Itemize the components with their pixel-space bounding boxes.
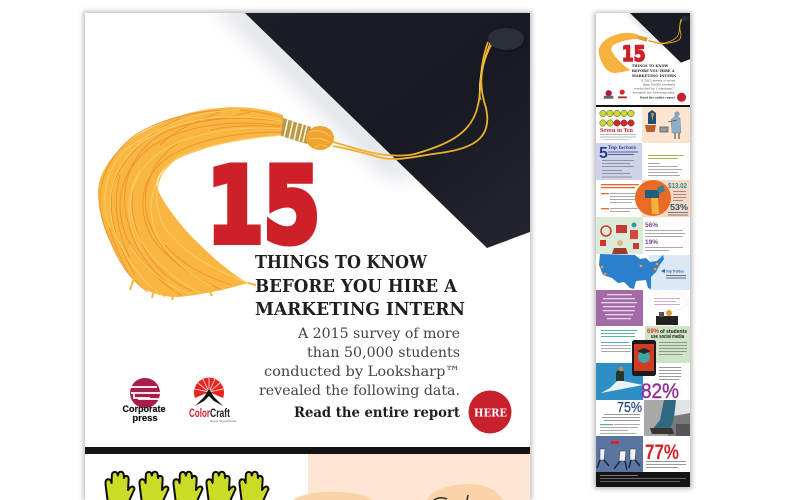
- figure head fragment: [434, 495, 468, 500]
- section: students' thoughts on unpaid internships: [601, 180, 690, 217]
- logo: Corporate Press: press: [132, 413, 158, 424]
- survey text: conducted by Looksharp™: [264, 364, 460, 380]
- thumbnail header: conducted by Looksharp™: [634, 87, 675, 91]
- tassel knot: [306, 126, 334, 150]
- HERE button: HERE: [474, 406, 507, 420]
- panel: thumbnail full infographic: [596, 11, 690, 487]
- read report call to action: Read the entire report: [294, 405, 461, 421]
- thumbnail header: BEFORE YOU HIRE A: [632, 69, 675, 73]
- thumbnail header: [599, 11, 690, 102]
- section: 5 top factors: 5: [599, 145, 608, 162]
- section: social media illustration and stats: 19%: [645, 239, 658, 246]
- tassel cords: [333, 42, 491, 159]
- thumbnail shadow: [594, 12, 692, 489]
- section: purple statement and speech bubble: [596, 290, 687, 326]
- title: THINGS TO KNOW: [255, 253, 427, 273]
- panel: seven in ten preview: [85, 454, 530, 500]
- stat: hourly wage: $13.02: [668, 183, 687, 190]
- peach background: [308, 454, 530, 500]
- number 15: 15: [207, 146, 320, 266]
- survey text: revealed the following data.: [259, 383, 460, 399]
- section: 77 percent running figures: [596, 436, 686, 472]
- logo: ColorCraft: [189, 378, 237, 423]
- panel: poster header: [85, 5, 530, 447]
- survey text: A 2015 survey of more: [297, 326, 460, 342]
- thumbnail header: than 50,000 students: [643, 83, 676, 87]
- title: [255, 253, 465, 320]
- section: social media illustration and stats: 56%: [645, 222, 658, 229]
- cap shadow on background: [212, 5, 425, 178]
- thumbnail header: A 2015 survey of more: [640, 79, 675, 83]
- section: 5 top factors: [596, 143, 684, 180]
- HERE button: [468, 390, 512, 434]
- thumbnail header: THINGS TO KNOW: [632, 64, 669, 68]
- orange circle: [635, 180, 671, 216]
- thumbnail header: MARKETING INTERN: [632, 74, 677, 78]
- hands row: [105, 472, 268, 500]
- thumbnail header: 15: [622, 42, 646, 67]
- stat: 53 percent: 53%: [670, 202, 688, 212]
- section: 69 percent social media: 69%: [647, 329, 660, 335]
- section: black footer: [596, 472, 690, 487]
- section: 75 percent and photo: [600, 399, 690, 436]
- main poster shadow: [83, 11, 532, 500]
- logo: Corporate Press: [122, 378, 166, 424]
- section: 75 percent and photo: 75%: [617, 399, 642, 416]
- graduation cap board: [245, 13, 530, 248]
- section: seven in ten: [600, 107, 690, 143]
- title: MARKETING INTERN: [255, 300, 465, 320]
- section: 69 percent social media: [601, 326, 690, 363]
- section: top 5 cities map: Top 5 cities: [666, 270, 684, 274]
- title: BEFORE YOU HIRE A: [255, 277, 457, 297]
- tassel barrel: [281, 118, 311, 144]
- icon: phone: [632, 340, 656, 376]
- photo: shoe and door: [644, 400, 690, 436]
- section: social media illustration and stats: [596, 217, 685, 254]
- section: 69 percent social media: use social media: [651, 334, 684, 340]
- logo: ColorCraft: Craft: [210, 408, 230, 420]
- section: paper plane and 82 percent: [596, 363, 681, 403]
- section: paper plane and 82 percent: 82%: [641, 380, 679, 403]
- section: 69 percent social media: of students: [660, 329, 687, 335]
- thumbnail header: Read the entire report: [640, 95, 676, 99]
- figure at desk: [656, 316, 678, 325]
- seven in ten heading: Seven in Ten: [600, 128, 633, 134]
- mini hands: [600, 110, 634, 126]
- survey text: [259, 326, 460, 399]
- illustration: plant and figure: [645, 110, 681, 139]
- survey text: than 50,000 students: [307, 345, 460, 361]
- section: top 5 cities map: [596, 254, 690, 290]
- cap button: [488, 28, 524, 50]
- section: 77 percent running figures: 77%: [645, 441, 679, 464]
- logo: ColorCraft: Color: [189, 408, 210, 420]
- thumbnail header: revealed the following data.: [633, 91, 675, 95]
- illustration blobs: [293, 484, 503, 500]
- logo: ColorCraft: Great Impressions: [210, 419, 237, 423]
- tassel: [98, 107, 334, 300]
- section: 5 top factors: Top factors: [608, 145, 636, 151]
- thumbnail divider: [596, 105, 690, 107]
- logo: Corporate Press: Corporate: [122, 404, 166, 415]
- divider bar: [85, 447, 530, 454]
